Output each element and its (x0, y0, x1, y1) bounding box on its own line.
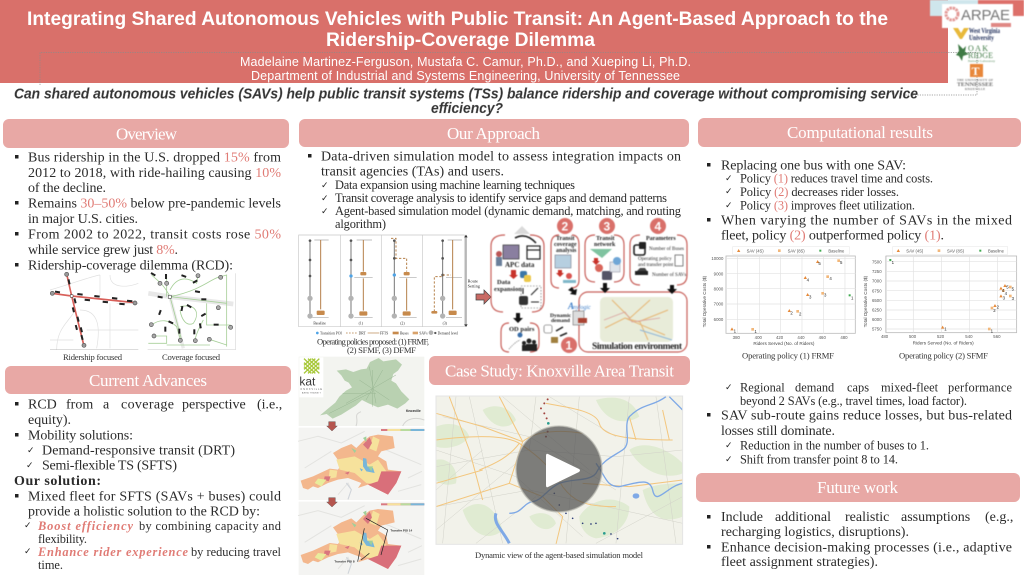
scatter chart: policy 2 SFMF: 500 (909, 334, 917, 339)
scatter chart: policy 2 SFMF: 6250 (872, 308, 882, 313)
legend: Baseline (828, 248, 845, 253)
logo: anylogic: A (567, 301, 574, 311)
scatter chart: policy 2 SFMF: 1 (892, 260, 895, 265)
text block: results upper: Policy (3) improves fleet utilization. (740, 198, 915, 212)
scatter chart: policy 1 FRMF: 7000 (714, 302, 724, 307)
scatter chart: policy 2 SFMF: 4 (1005, 291, 1008, 296)
box: transit coverage analysis: Transit (556, 236, 575, 242)
authors and department: Department of Industrial and Systems Engineering, University of Tennessee (251, 69, 680, 83)
map: coverage analysis (298, 428, 424, 500)
text block: current advances bullets: from (66, 398, 93, 412)
title (27, 9, 888, 51)
text block: current advances bullets: by reducing travel (191, 545, 282, 559)
text block: overview bullets: Remains 30–50% below pre-pandemic levels (28, 196, 281, 212)
scatter chart: policy 1 FRMF (700, 245, 856, 348)
diagram: operating policies: (1) (359, 321, 364, 325)
diagram: simulation workflow (491, 218, 687, 353)
scatter chart: policy 2 SFMF (861, 245, 1019, 348)
text block: current advances bullets: Our solution: (14, 474, 101, 489)
logo: University of Tennessee: T (972, 64, 980, 78)
scatter chart: policy 2 SFMF: 4 (1002, 288, 1005, 293)
text block: results lower: Reduction in the number of buses to 1. (740, 438, 929, 452)
scatter chart: policy 2 SFMF: Total Operative Costs ($) (863, 275, 868, 327)
logo: University of Tennessee: KNOXVILLE (965, 87, 985, 91)
logo: West Virginia University (953, 27, 1000, 42)
text block: current advances bullets: perspective (182, 398, 246, 412)
logo: University of Tennessee: THE UNIVERSITY OF (957, 78, 993, 82)
panel: current advances (5, 366, 291, 572)
text block: results upper: Policy (1) reduces travel time and costs. (740, 172, 933, 186)
logo: University of Tennessee: TENNESSEE (957, 82, 994, 88)
legend: Buses (400, 331, 409, 335)
text block: approach bullets: Data-driven simulation model to assess integration impacts on (321, 150, 681, 164)
scatter chart: policy 1 FRMF: 3 (809, 294, 812, 299)
box: transit coverage analysis: coverage (554, 242, 577, 248)
caption: operating policies: (2) SFMF, (3) DFMF (347, 345, 416, 355)
logo: ARPAE: ARPAE (961, 7, 1010, 24)
step marker: 4 (650, 218, 666, 234)
text block: current advances bullets: (i.e., (257, 398, 282, 412)
text block: future work bullets: recharging logistics, disruptions). (721, 525, 909, 540)
logo: Oak Ridge: National Laboratory (968, 59, 996, 63)
legend: FFTS (380, 331, 388, 335)
diagram: operating policies: Baseline (313, 321, 326, 325)
text block: overview bullets: Bus ridership in the U.S. dropped 15% from (28, 150, 281, 166)
scatter chart: policy 1 FRMF: 9000 (714, 271, 724, 276)
text block: current advances bullets: by combining capacity and (139, 519, 282, 533)
scatter chart: policy 1 FRMF: 1 (734, 329, 737, 334)
scatter chart: policy 2 SFMF: 1 (991, 328, 994, 333)
text block: results upper: ✓ (725, 187, 733, 197)
text block: future work bullets: Include (721, 510, 763, 525)
scatter chart: policy 2 SFMF: 520 (937, 334, 945, 339)
logo: West Virginia University: University (969, 34, 994, 42)
text block: overview bullets (15, 150, 281, 274)
scatter chart: policy 2 SFMF: 560 (993, 334, 1001, 339)
scatter chart: policy 1 FRMF: 440 (797, 335, 805, 340)
scatter chart: policy 2 SFMF: 2 (993, 308, 996, 313)
text block: results lower: caps (847, 380, 869, 394)
map: coverage focused (148, 272, 236, 350)
caption: operating policies: Operating policies proposed: (1) FRMF, (317, 336, 429, 346)
scatter chart: policy 1 FRMF: 460 (819, 335, 826, 340)
text block: approach bullets (308, 150, 681, 231)
box: parameters: Number of Buses (649, 247, 684, 252)
scatter chart: policy 1 FRMF: 480 (840, 335, 848, 340)
logo: Oak Ridge: OAK (968, 44, 988, 53)
text block: results upper: Policy (2) decreases rider losses. (740, 185, 899, 199)
text block: overview bullets: of the decline. (28, 181, 106, 196)
text block: future work bullets: realistic (845, 510, 889, 525)
scatter chart: policy 2 SFMF: 480 (881, 334, 889, 339)
scatter chart: policy 1 FRMF: 2 (799, 311, 802, 316)
scatter chart: policy 1 FRMF: Total Operative Costs ($) (702, 275, 707, 327)
step marker: 1 (561, 337, 577, 353)
title: Integrating Shared Autonomous Vehicles with Public Transit: An Agent-Based Approach to the (27, 9, 888, 30)
map: transfer points (298, 502, 424, 575)
box: data expansion: Data (497, 279, 511, 286)
scatter chart: policy 1 FRMF: 1 (851, 295, 854, 300)
text block: current advances bullets: Mixed fleet for SFTS (SAVs + buses) could (28, 490, 281, 504)
text block: results lower: losses still dominate. (721, 424, 835, 439)
logo: West Virginia University: West Virginia (969, 27, 1000, 35)
scatter chart: policy 1 FRMF: 4 (807, 277, 810, 282)
text block: results upper: Replacing one bus with one SAV: (721, 158, 906, 174)
text block: current advances bullets: ✓ (24, 547, 32, 557)
heading: computational results (698, 118, 1021, 147)
logo: Oak Ridge (956, 44, 996, 63)
text block: results upper: ✓ (725, 174, 733, 184)
arrow: down 1 (327, 422, 337, 431)
text block: current advances bullets: coverage (121, 398, 174, 412)
title: Ridership-Coverage Dilemma (326, 30, 595, 51)
heading: computational results: Computational results (787, 123, 933, 142)
scatter chart: policy 1 FRMF: 380 (733, 335, 740, 340)
scatter chart: policy 2 SFMF: 5 (1012, 287, 1015, 292)
text block: overview bullets: while service grew just 8%. (28, 243, 178, 258)
box: transit coverage analysis (551, 235, 579, 288)
text block: current advances bullets (14, 398, 282, 572)
text block: current advances bullets: Semi-flexible TS (SFTS) (42, 458, 177, 474)
scatter chart: policy 2 SFMF: 7000 (872, 279, 882, 284)
panel: case study (429, 356, 690, 560)
heading: future work (696, 473, 1020, 502)
logos (930, 0, 1024, 91)
text block: results lower: beyond 2 SAVs (e.g., travel times, load factor). (740, 394, 967, 408)
heading: future work: Future work (817, 478, 898, 497)
text block: results lower: demand (795, 380, 835, 394)
text block: approach bullets: algorithm) (335, 217, 386, 231)
text block: results lower: SAV sub-route gains reduce losses, but bus-related (721, 408, 1012, 424)
scatter chart: policy 1 FRMF: 1 (754, 329, 757, 334)
step marker: 2 (557, 218, 573, 234)
map: simulation video still (436, 396, 683, 544)
logo: kat: kat (299, 375, 316, 389)
logo: University of Tennessee (957, 64, 994, 91)
box: data expansion: APC data (505, 261, 535, 269)
heading: our approach: Our Approach (447, 124, 540, 143)
text block: overview bullets: From 2002 to 2022, transit costs rose 50% (28, 228, 281, 242)
text block: results lower: ✓ (725, 455, 733, 465)
caption: coverage focused: Coverage focused (162, 352, 221, 362)
text block: future work bullets: assumptions (901, 510, 970, 525)
logo: kat: AREA TRANSIT (302, 391, 321, 394)
heading: current advances: Current Advances (89, 371, 207, 390)
scatter chart: policy 1 FRMF: Riders Served (No. of Riders) (753, 341, 815, 346)
header banner (0, 0, 948, 83)
heading: current advances (5, 366, 291, 394)
scatter chart: policy 2 SFMF: 540 (965, 334, 973, 339)
box: OD pairs (501, 323, 539, 352)
scatter chart: policy 2 SFMF: 7500 (872, 259, 882, 264)
scatter chart: policy 2 SFMF: 2 (997, 305, 1000, 310)
panel: overview (3, 119, 289, 362)
map: ridership focused (50, 272, 138, 350)
box: parameters: Operating policy (638, 257, 672, 262)
text block: approach bullets: Transit coverage analysis to identify service gaps and demand patterns (335, 191, 667, 205)
heading: our approach (299, 119, 689, 147)
text block: results lower: performance (948, 380, 1012, 394)
step marker: 1: 1 (566, 338, 572, 352)
text block: results lower: ✓ (725, 383, 733, 393)
text block: current advances bullets: Demand-responsive transit (DRT) (42, 444, 235, 458)
research question: Can shared autonomous vehicles (SAVs) help public transit systems (TSs) balance ridership and coverage without compromising service (14, 86, 918, 102)
scatter chart: policy 1 FRMF: 5 (840, 260, 843, 265)
text block: current advances bullets: time. (38, 558, 63, 572)
logo: kat (299, 357, 323, 397)
research question: efficiency? (431, 101, 503, 117)
box: simulation environment (579, 292, 687, 352)
authors and department: Madelaine Martinez-Ferguson, Mustafa C. Camur, Ph.D., and Xueping Li, Ph.D. (240, 55, 691, 69)
diagram: operating policies (299, 235, 481, 337)
step marker: 2: 2 (562, 220, 568, 234)
icon: video play button (516, 426, 602, 512)
step marker: 3: 3 (604, 220, 610, 234)
text block: current advances bullets: Mobility solutions: (28, 428, 133, 444)
map stack: KAT service area (298, 357, 424, 575)
text block: results lower: Shift from transfer point 8 to 14. (740, 452, 898, 466)
text block: results upper (707, 158, 1012, 244)
box: transit network (585, 235, 624, 282)
scatter chart: policy 1 FRMF: 4 (829, 276, 832, 281)
scatter chart: policy 1 FRMF: 420 (776, 335, 784, 340)
diagram: operating policies: (2) (400, 321, 405, 325)
legend: SAVs (419, 331, 428, 335)
text block: results lower: Regional (740, 380, 785, 394)
box: data expansion: expansion (494, 286, 522, 293)
heading: overview (3, 119, 289, 148)
scatter chart: policy 1 FRMF: 3 (824, 293, 827, 298)
text block: current advances bullets: equity). (28, 413, 71, 428)
box: parameters: Number of SAVs (652, 273, 686, 278)
logo: anylogic: nylogic (573, 305, 591, 311)
box: transit network: Transit (596, 236, 615, 242)
box: parameters (630, 235, 687, 285)
scatter chart: policy 1 FRMF: 5 (818, 261, 821, 266)
text block: current advances bullets: RCD (28, 398, 57, 412)
panel: our approach (298, 119, 690, 575)
panel: computational results (698, 118, 1021, 466)
text block: current advances bullets: a (103, 398, 110, 412)
map: KAT service area (299, 357, 424, 426)
legend: Transition POI (320, 331, 342, 335)
box: parameters: Parameters (646, 236, 676, 242)
text block: results lower (707, 380, 1012, 466)
map: transfer points: Transfer POI 8 (334, 559, 355, 563)
text block: future work bullets: fleet assignment strategies). (721, 555, 878, 570)
text block: current advances bullets: Boost efficiency (37, 519, 134, 533)
text block: approach bullets: ✓ (321, 207, 329, 217)
arrows: workflow (513, 283, 677, 323)
text block: future work bullets: (e.g., (985, 510, 1013, 525)
map: KAT service area: Knoxville (406, 409, 421, 413)
scatter chart: policy 1 FRMF: 8000 (714, 286, 724, 291)
diagram: operating policies: (3) (443, 321, 448, 325)
text block: results upper: ✓ (725, 201, 733, 211)
scatter chart: policy 2 SFMF: 6000 (872, 317, 882, 322)
box: parameters: and transfer point (638, 263, 674, 268)
step marker: 4: 4 (654, 220, 662, 234)
text block: results lower: mixed-fleet (881, 380, 939, 394)
scatter chart: policy 1 FRMF: 6000 (714, 317, 724, 322)
text block: current advances bullets: flexibility. (38, 532, 87, 546)
scatter chart: policy 2 SFMF: 6500 (872, 298, 882, 303)
research question (14, 86, 918, 117)
text block: current advances bullets: ✓ (27, 446, 35, 456)
text block: results upper: When varying the number of SAVs in the mixed (721, 214, 1012, 228)
label: dynamic demand: demand (551, 318, 570, 324)
scatter chart: policy 2 SFMF: 6750 (872, 288, 882, 293)
box: data expansion (491, 226, 544, 312)
scatter chart: policy 1 FRMF: 2 (790, 310, 793, 315)
box: OD pairs: OD pairs (509, 326, 535, 333)
text block: future work bullets (707, 510, 1013, 570)
text block: overview bullets: Ridership-coverage dilemma (RCD): (28, 258, 233, 274)
legend (316, 330, 458, 335)
scatter chart: policy 2 SFMF: 3 (1012, 296, 1015, 301)
label: dynamic demand (544, 313, 572, 343)
text block: results lower: ✓ (725, 441, 733, 451)
legend: SAV (8S) (947, 248, 965, 253)
text block: current advances bullets: provide a holistic solution to the RCD by: (28, 504, 260, 520)
caption: simulation model: Dynamic view of the agent-based simulation model (475, 550, 644, 560)
text block: approach bullets: ✓ (321, 181, 329, 191)
text block: overview bullets: in major U.S. cities. (28, 212, 138, 227)
legend: DRT (359, 331, 367, 335)
logo: Oak Ridge: RIDGE (968, 51, 993, 60)
authors and department (240, 55, 691, 83)
heading: case study: Case Study: Knoxville Area Transit (445, 362, 674, 380)
arrow: to workflow (476, 290, 491, 304)
legend (893, 247, 1008, 254)
caption: policy 2: Operating policy (2) SFMF (899, 350, 988, 360)
caption: policy 1: Operating policy (1) FRMF (742, 350, 834, 360)
legend: SAV (4S) (906, 248, 924, 253)
text block: current advances bullets: ✓ (26, 461, 34, 471)
diagram: operating policies: Setting (468, 283, 481, 288)
logo: anylogic (567, 301, 591, 325)
legend: SAV (8S) (788, 248, 805, 253)
legend: Demand level (438, 331, 458, 335)
box: transit network: network (594, 242, 616, 248)
scatter chart: policy 2 SFMF: 7250 (872, 269, 882, 274)
text block: current advances bullets: ✓ (24, 521, 32, 531)
heading: case study (429, 356, 690, 385)
diagram: operating policies: Route (468, 279, 478, 284)
scatter chart: policy 2 SFMF: 5 (1006, 285, 1009, 290)
policy columns (310, 240, 443, 316)
text block: results upper: fleet, policy (2) outperformed policy (1). (721, 228, 944, 244)
arrow: down 2 (327, 498, 337, 507)
box: simulation environment: Simulation environment (592, 342, 683, 352)
scatter chart: policy 1 FRMF: 400 (755, 335, 762, 340)
scatter chart: policy 2 SFMF: 5750 (872, 327, 882, 332)
box: transit coverage analysis: analysis (556, 248, 577, 254)
scatter chart: policy 2 SFMF: Riders Served (No. of Riders) (913, 341, 974, 346)
scatter chart: policy 2 SFMF: 1 (944, 327, 947, 332)
text block: approach bullets: ✓ (321, 194, 329, 204)
text block: future work bullets: additional (775, 510, 831, 525)
text block: approach bullets: Data expansion using machine learning techniques (335, 178, 575, 192)
logo: kat: KNOXVILLE (301, 389, 322, 391)
text block: approach bullets: Agent-based simulation model (dynamic demand, matching, and routing (335, 204, 681, 218)
caption: ridership focused: Ridership focused (63, 352, 123, 362)
text block: current advances bullets: Enhance rider experience (37, 545, 188, 559)
label: dynamic demand: Dynamic (550, 313, 572, 319)
scatter chart: policy 1 FRMF: 10000 (711, 256, 724, 261)
text block: future work bullets: Enhance decision-making processes (i.e., adaptive (721, 540, 1012, 556)
scatter chart: policy 2 SFMF: 3 (1003, 295, 1006, 300)
step marker: 3 (599, 218, 615, 234)
text block: overview bullets: 2012 to 2018, with ride-hailing causing 10% (28, 166, 281, 181)
legend (733, 247, 849, 254)
caption: operating policies (317, 336, 429, 355)
panel: future work (696, 473, 1020, 570)
heading: overview: Overview (116, 124, 178, 144)
legend: SAV (4S) (747, 248, 764, 253)
text block: approach bullets: transit agencies (TAs) and users. (321, 164, 504, 180)
map: transfer points: Transfer POI 14 (390, 529, 413, 533)
legend: Baseline (988, 248, 1005, 253)
